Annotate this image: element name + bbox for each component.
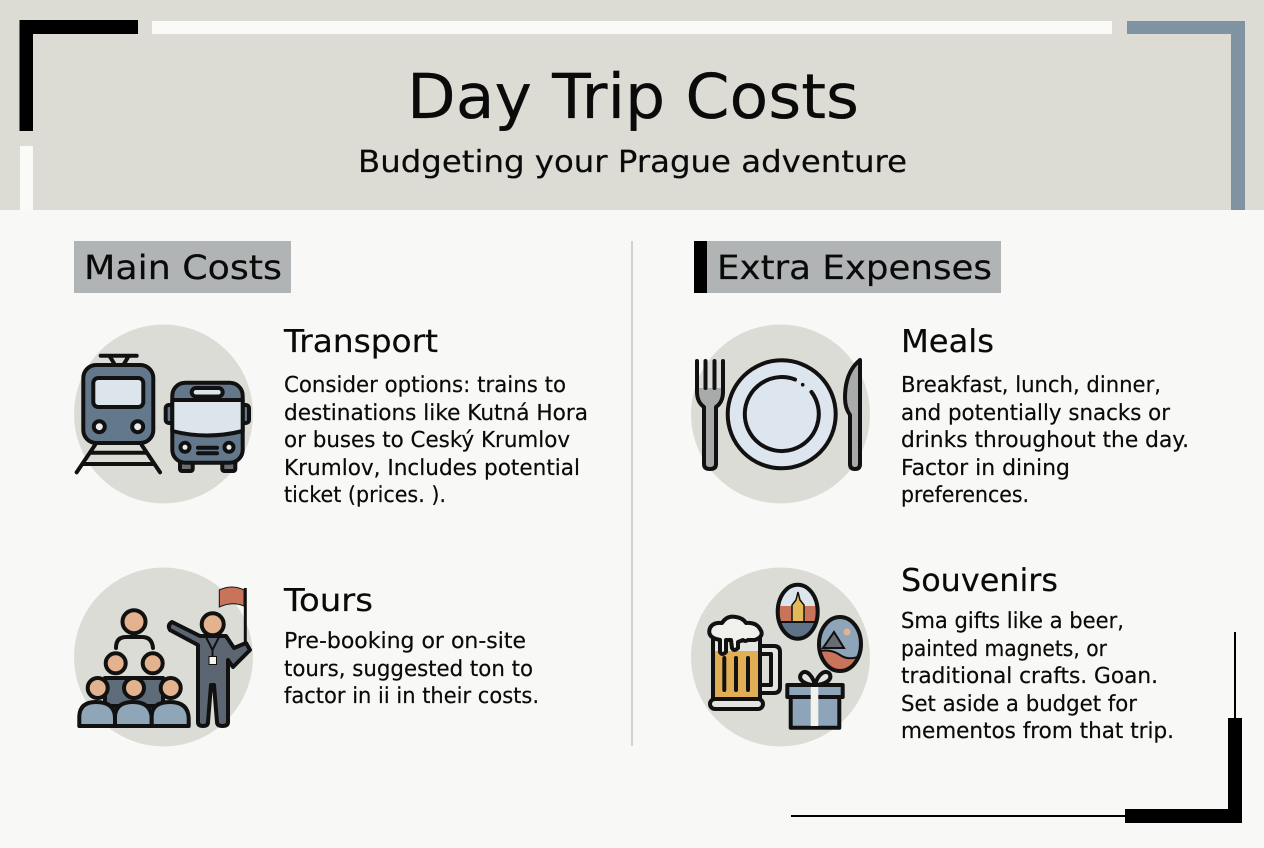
text: meals description: and potentially snacks or	[901, 401, 1171, 426]
text: meals description: preferences.	[901, 483, 1029, 508]
text: souvenirs description: traditional crafts. Goan.	[901, 664, 1158, 689]
text: souvenirs description: Set aside a budget for	[901, 692, 1138, 717]
text: meals description: Breakfast, lunch, dinner,	[901, 373, 1161, 398]
text: meals description: drinks throughout the day.	[901, 428, 1189, 453]
heading: Main Costs	[74, 241, 291, 293]
header band	[0, 0, 1264, 210]
panel: meals	[691, 324, 1189, 508]
panel: souvenirs	[691, 563, 1174, 746]
heading: Main Costs: Main Costs	[84, 248, 282, 287]
text: meals description: Factor in dining	[901, 456, 1070, 481]
text: transport description: Krumlov, Includes potential	[284, 456, 580, 481]
panel: tours	[74, 568, 539, 746]
text: transport description: destinations like Kutná Hora	[284, 401, 588, 426]
heading: Extra Expenses: Extra Expenses	[717, 248, 992, 287]
bottom-right black corner frame	[791, 632, 1242, 823]
text: souvenirs heading: Souvenirs	[901, 563, 1058, 599]
top-right blue corner frame	[1127, 21, 1245, 210]
icon: beer mug, magnets and gift	[691, 568, 870, 746]
text: transport description	[284, 373, 588, 508]
icon: plate and cutlery	[691, 324, 870, 504]
heading: Extra Expenses	[694, 241, 1001, 293]
text: souvenirs description: mementos from that trip.	[901, 719, 1174, 744]
text: transport description: ticket (prices. ).	[284, 483, 446, 508]
center divider	[631, 241, 633, 746]
text: tours description: Pre-booking or on-site	[284, 629, 526, 654]
text: tours description: factor in ii in their costs.	[284, 684, 539, 709]
text: tours description: tours, suggested ton to	[284, 657, 533, 682]
white frame segments	[20, 21, 1112, 210]
text: meals description	[901, 373, 1189, 508]
text: souvenirs description	[901, 609, 1174, 744]
top-left black corner frame	[20, 20, 138, 131]
text: transport heading: Transport	[283, 324, 438, 360]
title: Day Trip Costs	[407, 60, 859, 133]
subtitle: Budgeting your Prague adventure	[358, 145, 907, 180]
icon: tour guide and group	[74, 568, 253, 746]
text: transport description: or buses to Ceský Krumlov	[284, 428, 570, 453]
panel: transport	[74, 324, 588, 508]
text: souvenirs description: painted magnets, or	[901, 637, 1108, 662]
text: transport description: Consider options: trains to	[284, 373, 566, 398]
icon: train and bus	[74, 324, 253, 504]
text: meals heading: Meals	[901, 324, 994, 360]
text: tours description	[284, 629, 539, 709]
text: souvenirs description: Sma gifts like a beer,	[901, 609, 1124, 634]
text: tours heading: Tours	[283, 583, 373, 619]
